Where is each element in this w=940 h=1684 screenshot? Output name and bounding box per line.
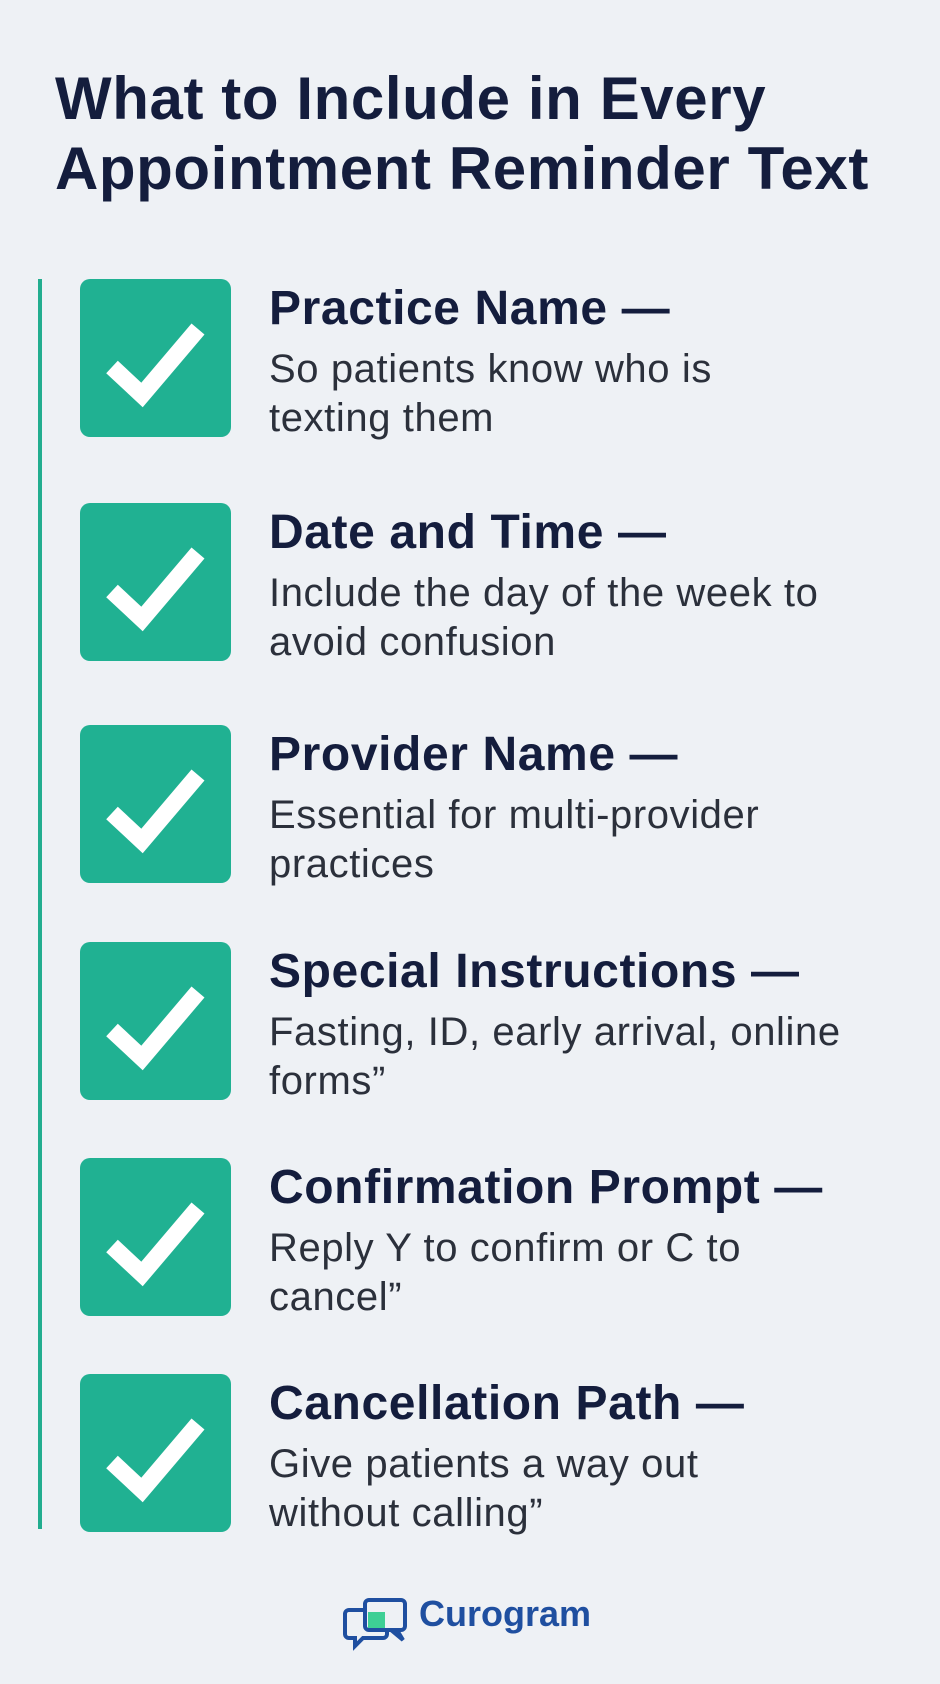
description: Fasting, ID, early arrival, online [269, 1010, 841, 1054]
description: Give patients a way out [269, 1442, 699, 1486]
icon: checkbox [80, 503, 231, 661]
description: cancel” [269, 1275, 402, 1319]
description [269, 347, 712, 440]
icon: checkbox [80, 1158, 231, 1316]
icon: chat bubbles [343, 1598, 407, 1651]
description: texting them [269, 396, 494, 440]
description: avoid confusion [269, 620, 556, 664]
description: Include the day of the week to [269, 571, 818, 615]
description: without calling” [269, 1491, 543, 1535]
item: confirmation prompt [80, 1158, 823, 1319]
title: What to Include in Every [55, 65, 766, 132]
description: So patients know who is [269, 347, 712, 391]
title [55, 65, 869, 202]
heading: Special Instructions — [269, 945, 800, 998]
item: provider name [80, 725, 759, 886]
item: special instructions [80, 942, 841, 1103]
item: date and time [80, 503, 818, 664]
heading: Provider Name — [269, 728, 678, 781]
item: practice name [80, 279, 712, 440]
description: practices [269, 842, 434, 886]
icon: checkbox [80, 279, 231, 437]
description [269, 1010, 841, 1103]
heading: Date and Time — [269, 506, 667, 559]
logo: Curogram [343, 1593, 591, 1651]
wordmark: Curogram [419, 1593, 591, 1634]
icon: checkbox [80, 1374, 231, 1532]
description [269, 1226, 741, 1319]
icon: checkbox [80, 725, 231, 883]
description [269, 1442, 699, 1535]
item: cancellation path [80, 1374, 744, 1535]
heading: Cancellation Path — [269, 1377, 744, 1430]
heading: Confirmation Prompt — [269, 1161, 823, 1214]
description: Reply Y to confirm or C to [269, 1226, 741, 1270]
description [269, 793, 759, 886]
description: Essential for multi-provider [269, 793, 759, 837]
title: Appointment Reminder Text [55, 135, 869, 202]
heading: Practice Name — [269, 282, 670, 335]
description: forms” [269, 1059, 386, 1103]
icon: checkbox [80, 942, 231, 1100]
description [269, 571, 818, 664]
